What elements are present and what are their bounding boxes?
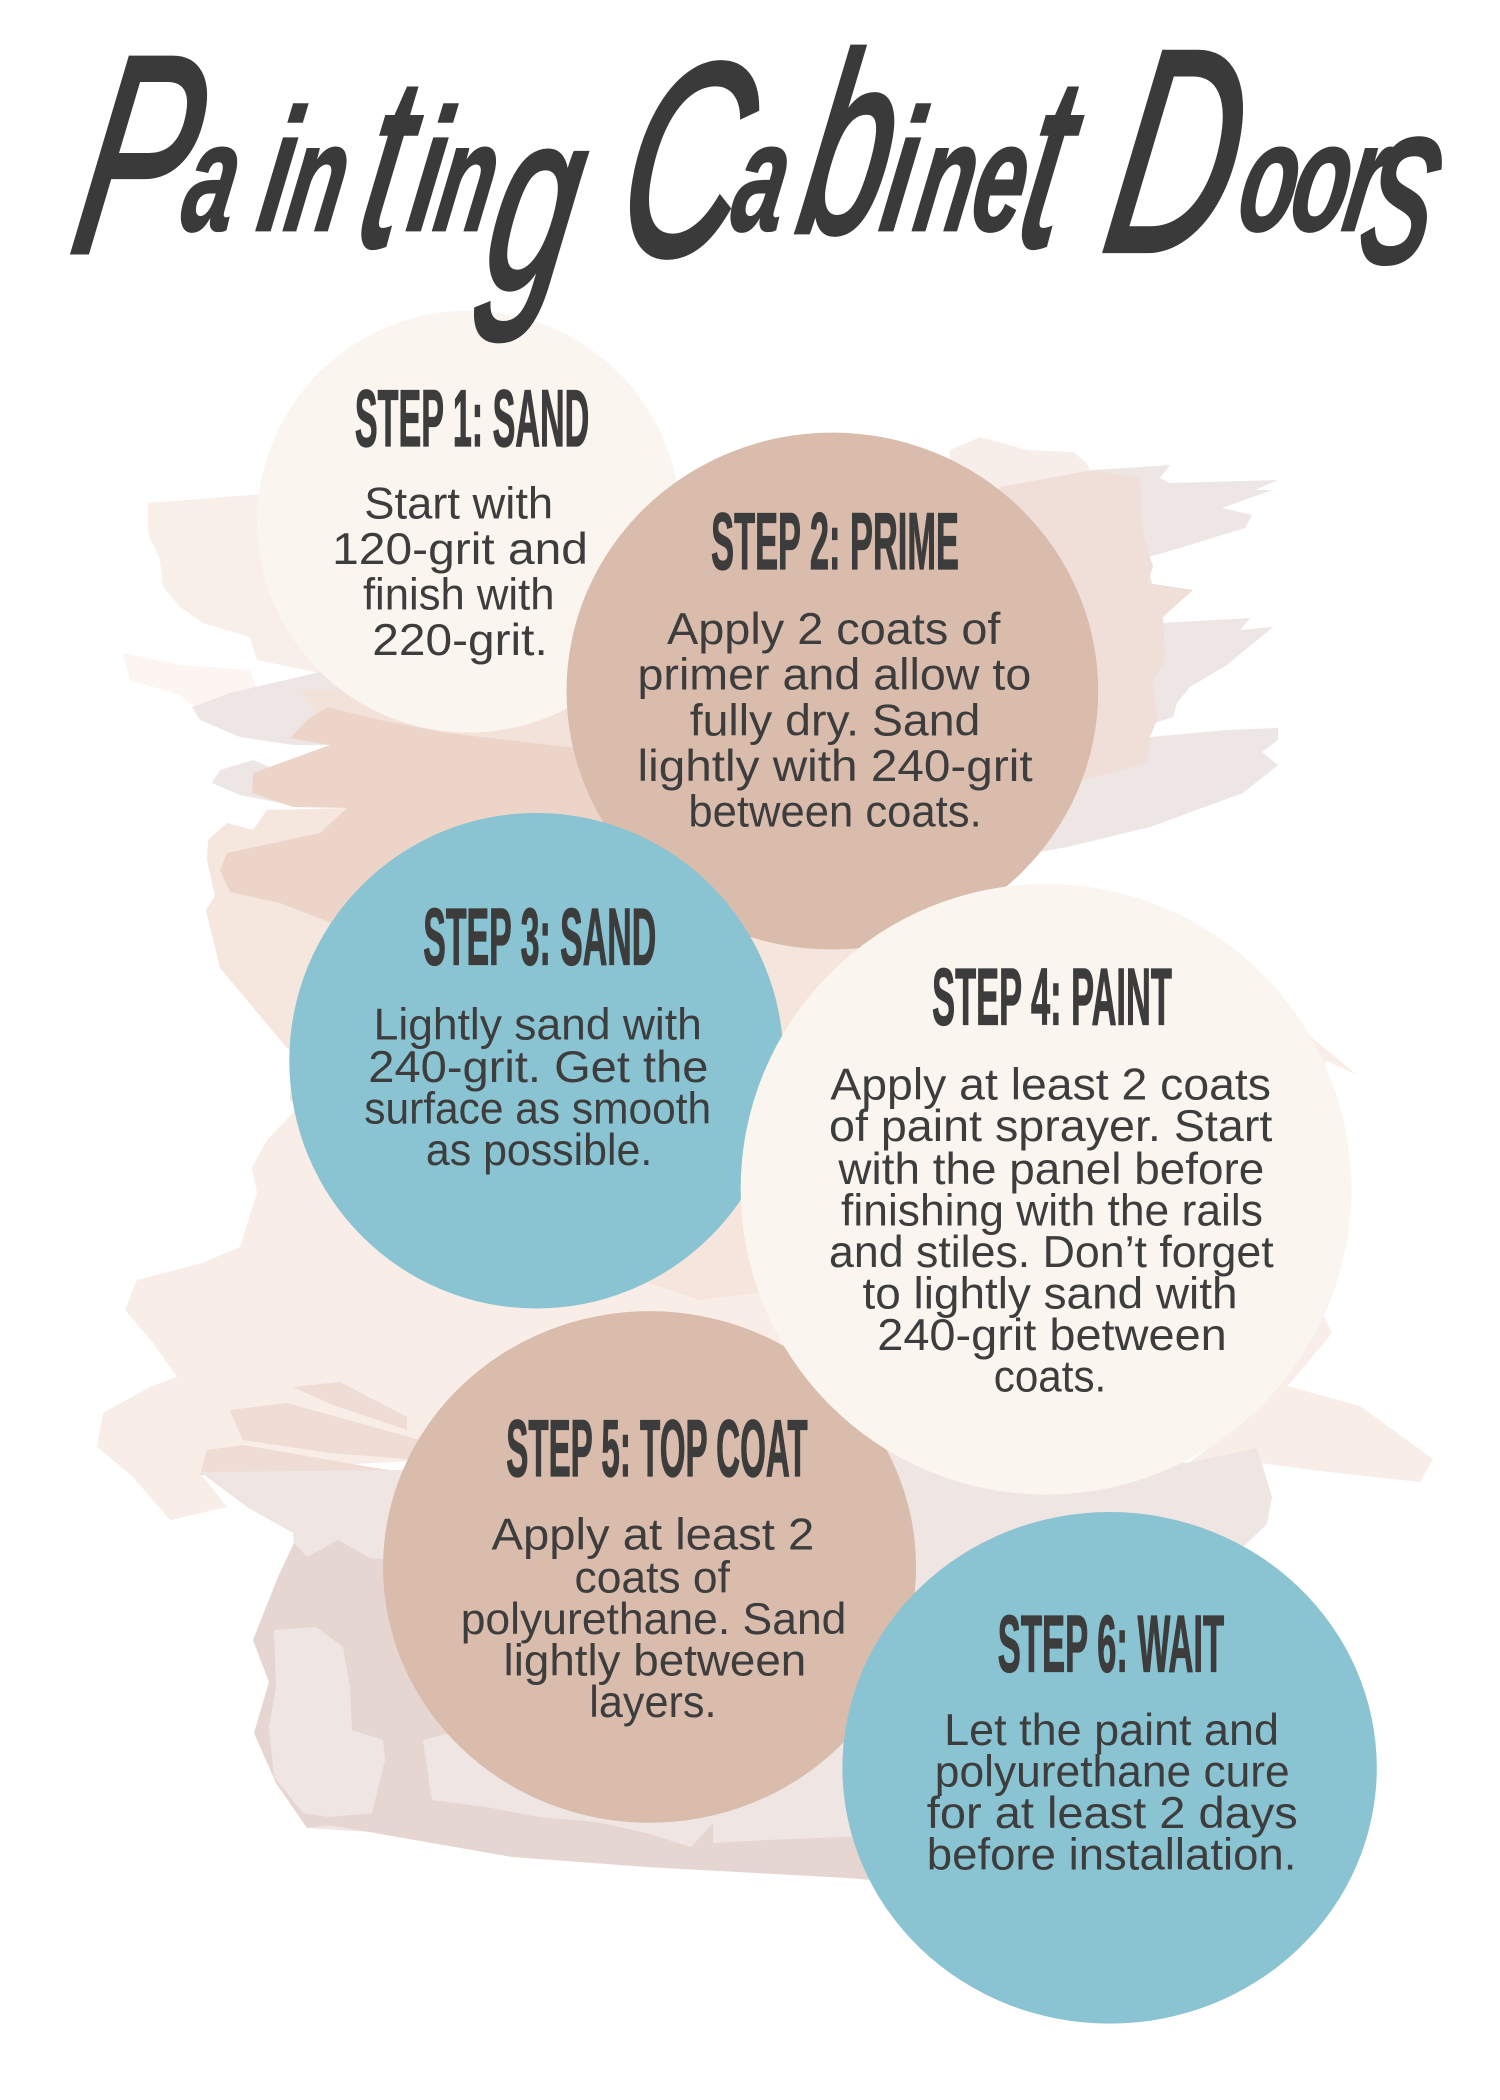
text: step 1: Start with: [364, 479, 553, 528]
text: step 2: fully dry. Sand: [690, 696, 980, 745]
text: step 5: polyurethane. Sand: [461, 1595, 846, 1644]
title: e: [961, 93, 1043, 264]
circle: step 4: [741, 884, 1351, 1495]
text: step 2: primer and allow to: [638, 651, 1031, 700]
text: step 3: as possible.: [426, 1126, 652, 1175]
title: b: [784, 2, 920, 286]
panel: step 5: [383, 1311, 916, 1823]
title: C: [601, 6, 776, 313]
title: a: [722, 93, 804, 264]
text: step 4: with the panel before: [837, 1145, 1264, 1194]
title: P: [56, 0, 225, 312]
circle: step 3: [289, 813, 783, 1308]
title: i: [398, 72, 464, 268]
text: step 3: Lightly sand with: [374, 1000, 702, 1049]
text: step 5: lightly between: [504, 1636, 806, 1685]
text: step 1: finish with: [363, 570, 554, 619]
title: o: [1280, 93, 1367, 264]
text: step 2: between coats.: [688, 787, 982, 836]
text: step 2: [638, 605, 1033, 836]
text: step 4: [829, 1061, 1274, 1402]
text: step 4: to lightly sand with: [862, 1269, 1238, 1318]
panel: step 4: STEP 4: PAINT: [932, 953, 1172, 1043]
title: r: [1334, 93, 1405, 264]
text: step 4: finishing with the rails: [841, 1186, 1263, 1235]
title: n: [425, 93, 512, 264]
panel: step 3: [289, 813, 783, 1308]
text: step 3: 240-grit. Get the: [368, 1043, 708, 1092]
text: step 5: Apply at least 2: [492, 1511, 814, 1560]
circle: step 2: [567, 433, 1098, 950]
text: step 1: 220-grit.: [372, 616, 548, 665]
panel: step 3: STEP 3: SAND: [423, 892, 656, 982]
panel: step 2: STEP 2: PRIME: [711, 497, 959, 587]
text: step 1: [332, 479, 588, 665]
title: s: [1349, 56, 1463, 310]
title: n: [276, 93, 363, 264]
title: a: [172, 93, 254, 264]
text: step 4: 240-grit between: [877, 1311, 1227, 1360]
text: step 6: polyurethane cure: [935, 1748, 1290, 1797]
text: step 4: coats.: [994, 1353, 1106, 1402]
text: step 6: Let the paint and: [944, 1706, 1279, 1755]
title: o: [1228, 93, 1315, 264]
panel: step 6: [842, 1512, 1377, 2024]
text: step 3: surface as smooth: [364, 1085, 711, 1134]
title: D: [1088, 0, 1271, 312]
title: n: [905, 93, 992, 264]
text: step 4: Apply at least 2 coats: [830, 1061, 1271, 1110]
text: step 2: Apply 2 coats of: [667, 605, 1001, 654]
title: t: [344, 27, 438, 297]
panel: step 1: [257, 311, 680, 733]
text: step 6: for at least 2 days: [927, 1789, 1298, 1838]
text: step 6: before installation.: [927, 1831, 1296, 1880]
text: step 4: of paint sprayer. Start: [829, 1102, 1272, 1151]
text: step 3: [364, 1000, 711, 1175]
text: step 6: [927, 1706, 1298, 1880]
title: i: [248, 72, 314, 268]
title: t: [1005, 27, 1099, 297]
panel: step 2: [567, 433, 1098, 950]
text: step 5: [461, 1511, 846, 1727]
text: step 4: and stiles. Don’t forget: [829, 1228, 1274, 1277]
panel: step 1: STEP 1: SAND: [355, 374, 589, 464]
background: paint brush strokes: [97, 437, 1433, 1885]
circle: step 5: [383, 1311, 916, 1823]
text: step 1: 120-grit and: [332, 525, 588, 574]
circle: step 6: [842, 1512, 1377, 2024]
title: g: [470, 58, 606, 342]
circle: step 1: [257, 311, 680, 733]
panel: step 4: [741, 884, 1351, 1495]
text: step 2: lightly with 240-grit: [638, 742, 1033, 791]
text: step 5: coats of: [575, 1553, 731, 1602]
title: i: [870, 72, 936, 268]
text: step 5: layers.: [589, 1678, 717, 1727]
panel: step 5: STEP 5: TOP COAT: [506, 1404, 808, 1494]
